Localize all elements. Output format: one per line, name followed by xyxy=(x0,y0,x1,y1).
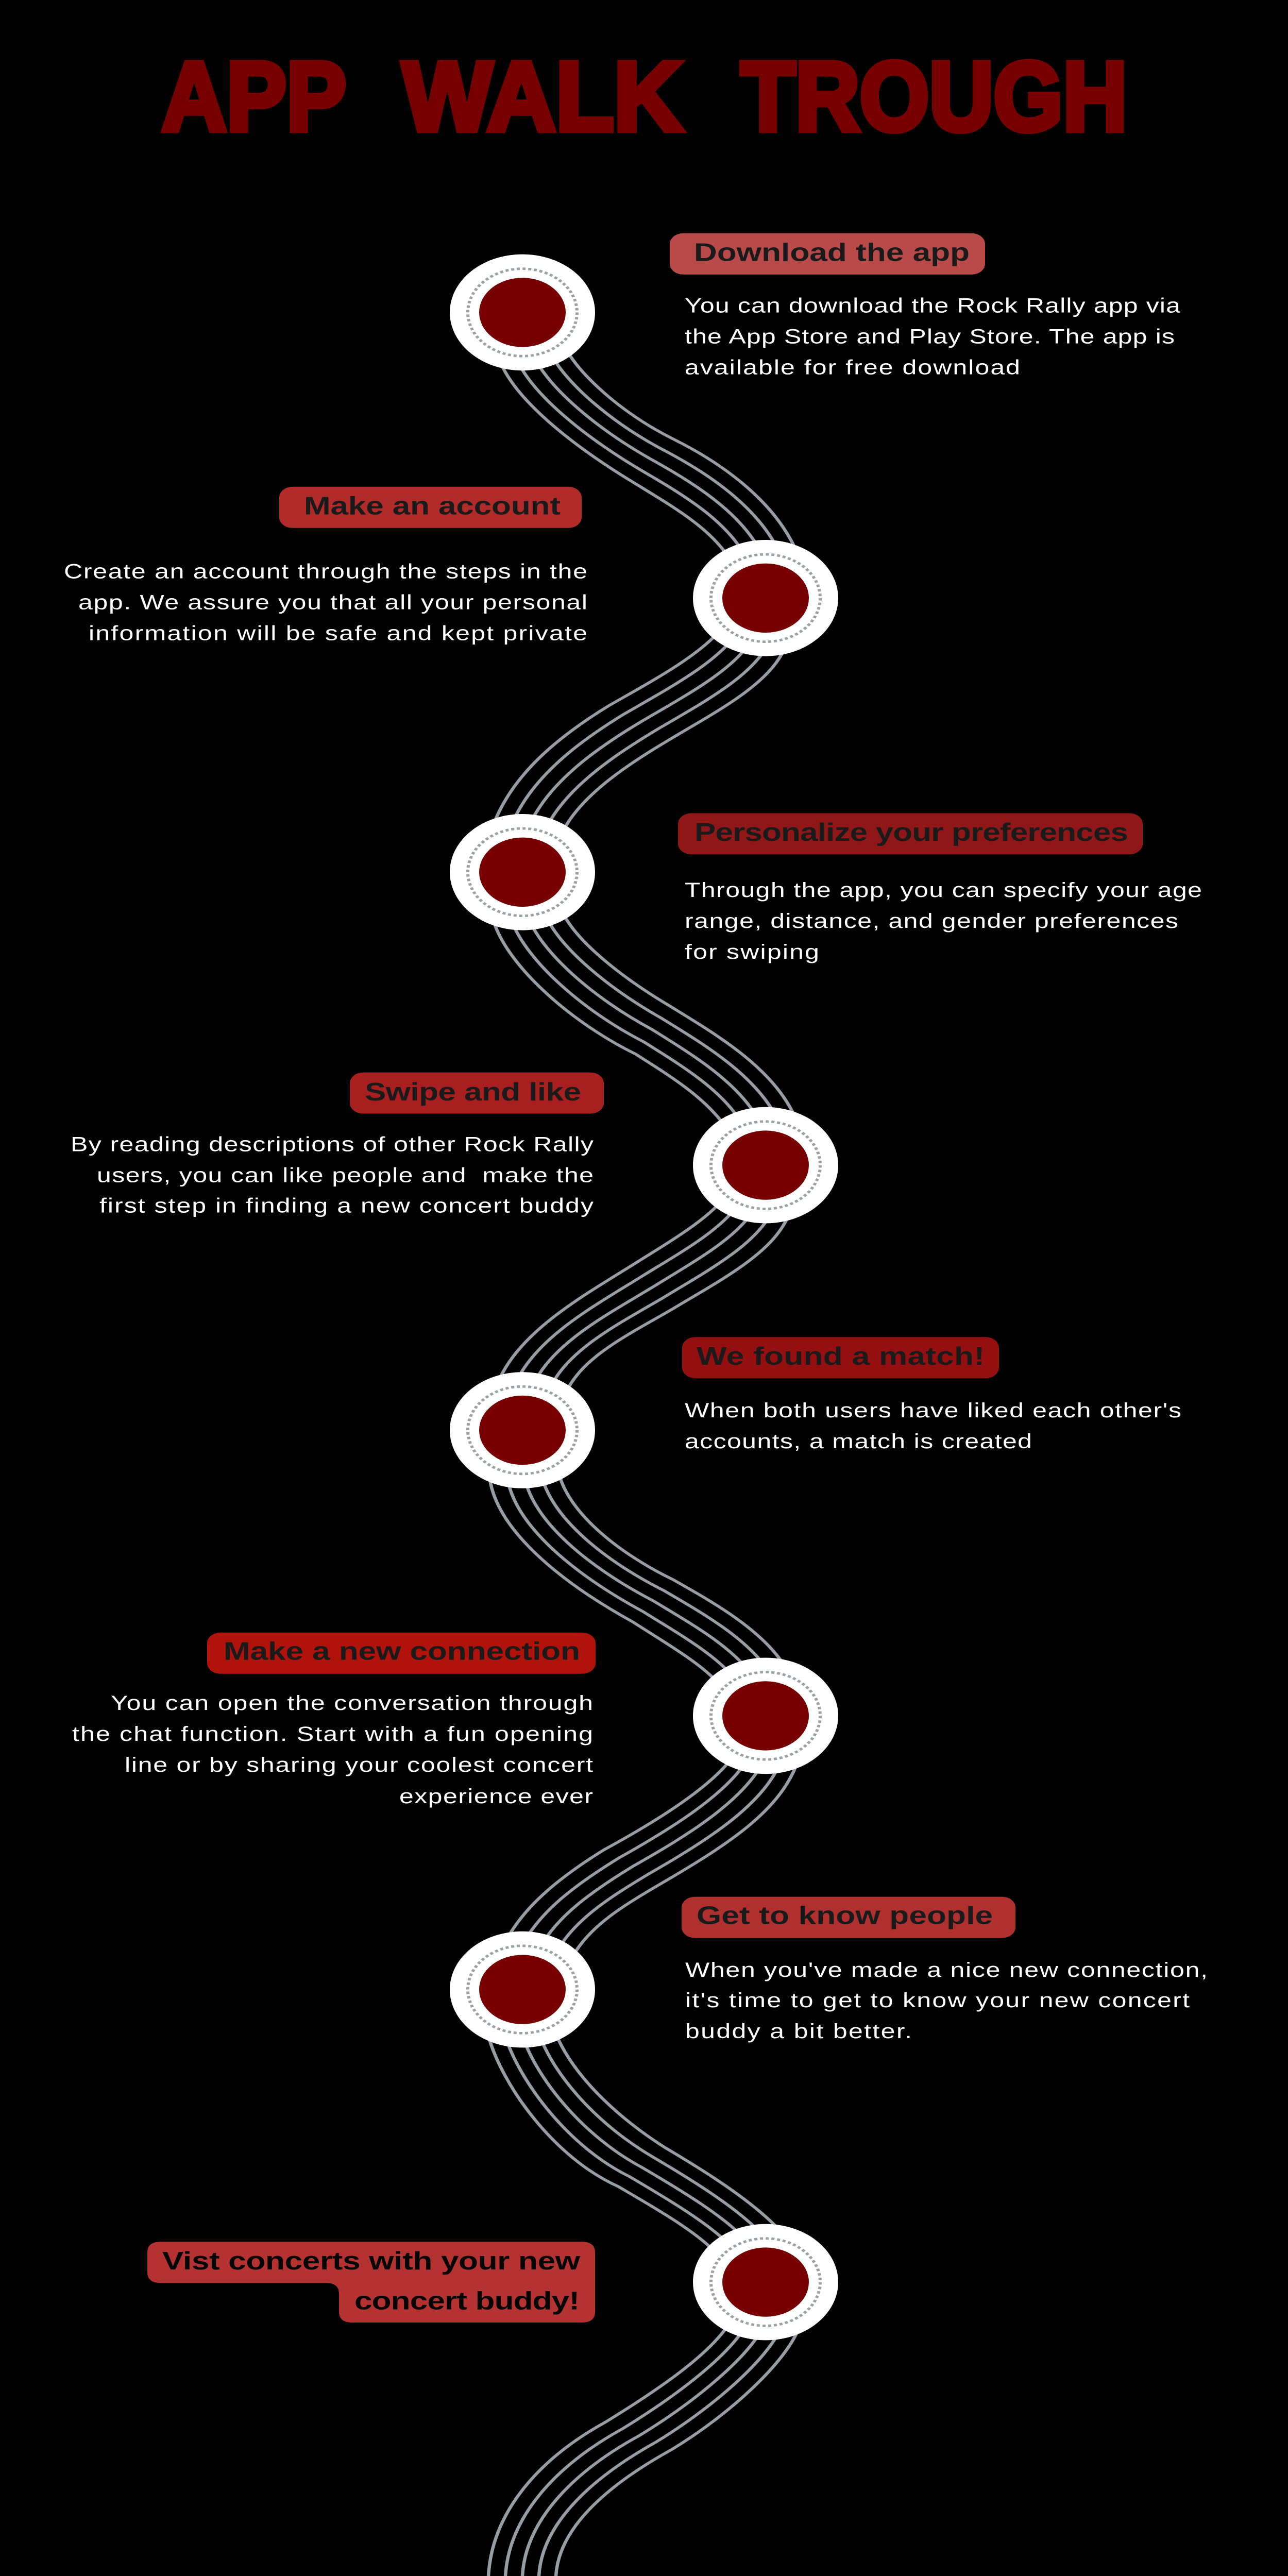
panel: step 4 swipe and like xyxy=(71,1073,838,1223)
panel: step 3 personalize your preferences xyxy=(450,813,1202,963)
panel: step 7 get to know people xyxy=(450,1897,1208,2047)
heading 4: Swipe and like xyxy=(365,1077,581,1106)
body text 4: users, you can like people and make the xyxy=(97,1163,594,1187)
heading 3: Personalize your preferences xyxy=(694,818,1128,846)
heading 4 xyxy=(350,1073,604,1114)
marker 6 xyxy=(693,1658,838,1774)
heading 5: We found a match! xyxy=(697,1342,985,1370)
body text 6: You can open the conversation through xyxy=(111,1691,593,1715)
body text 7 xyxy=(685,1958,1208,2043)
marker 4 xyxy=(693,1107,838,1223)
panel: step 6 make a new connection xyxy=(72,1633,838,1808)
body text 7: When you've made a nice new connection, xyxy=(685,1958,1208,1981)
body text 1: You can download the Rock Rally app via xyxy=(685,294,1181,317)
body text 7: it's time to get to know your new concert xyxy=(685,1989,1190,2012)
marker 5 xyxy=(450,1372,595,1488)
marker 7 xyxy=(450,1931,595,2047)
marker 2 xyxy=(693,540,838,656)
body text 5 xyxy=(685,1399,1181,1453)
heading 8 xyxy=(147,2242,595,2323)
body text 2: information will be safe and kept private xyxy=(89,621,587,645)
panel: step 2 make an account xyxy=(64,487,838,656)
title: TROUGH xyxy=(741,42,1127,151)
body text 2: Create an account through the steps in the xyxy=(64,560,587,583)
body text 6: experience ever xyxy=(399,1785,593,1808)
body text 4: By reading descriptions of other Rock Rally xyxy=(71,1132,594,1156)
panel: step 1 download the app xyxy=(450,233,1181,379)
body text 6 xyxy=(72,1691,593,1808)
body text 1: available for free download xyxy=(685,355,1020,379)
heading 8: concert buddy! xyxy=(354,2286,580,2315)
body text 3: Through the app, you can specify your age xyxy=(685,878,1202,902)
connector: winding five-line path xyxy=(488,350,799,2576)
body text 1: the App Store and Play Store. The app is xyxy=(685,325,1175,348)
body text 3: for swiping xyxy=(685,940,819,963)
panel: step 5 we found a match xyxy=(450,1337,1181,1488)
body text 3 xyxy=(685,878,1202,963)
heading 7: Get to know people xyxy=(697,1901,993,1929)
title: APP xyxy=(162,42,346,151)
title: WALK xyxy=(402,42,683,151)
body text 4 xyxy=(71,1132,594,1217)
marker 1 xyxy=(450,255,595,370)
heading 5 xyxy=(682,1337,999,1378)
title xyxy=(162,42,1127,151)
marker 8 xyxy=(693,2224,838,2340)
body text 1 xyxy=(685,294,1181,379)
heading 3 xyxy=(678,813,1143,854)
body text 4: first step in finding a new concert buddy xyxy=(99,1194,594,1217)
body text 6: the chat function. Start with a fun opening xyxy=(72,1722,593,1745)
body text 5: accounts, a match is created xyxy=(685,1430,1032,1453)
body text 6: line or by sharing your coolest concert xyxy=(125,1753,593,1776)
heading 1: Download the app xyxy=(694,238,970,266)
heading 2: Make an account xyxy=(304,491,561,520)
panel: step 8 visit concerts xyxy=(147,2224,838,2340)
heading 8: Vist concerts with your new xyxy=(162,2246,580,2275)
body text 2 xyxy=(64,560,587,645)
heading 1 xyxy=(670,233,985,275)
heading 6: Make a new connection xyxy=(224,1637,580,1665)
body text 3: range, distance, and gender preferences xyxy=(685,909,1178,933)
heading 2 xyxy=(279,487,582,528)
heading 6 xyxy=(207,1633,596,1674)
body text 7: buddy a bit better. xyxy=(685,2020,912,2043)
heading 7 xyxy=(682,1897,1015,1938)
body text 2: app. We assure you that all your personal xyxy=(78,590,587,614)
body text 5: When both users have liked each other's xyxy=(685,1399,1181,1422)
marker 3 xyxy=(450,814,595,930)
